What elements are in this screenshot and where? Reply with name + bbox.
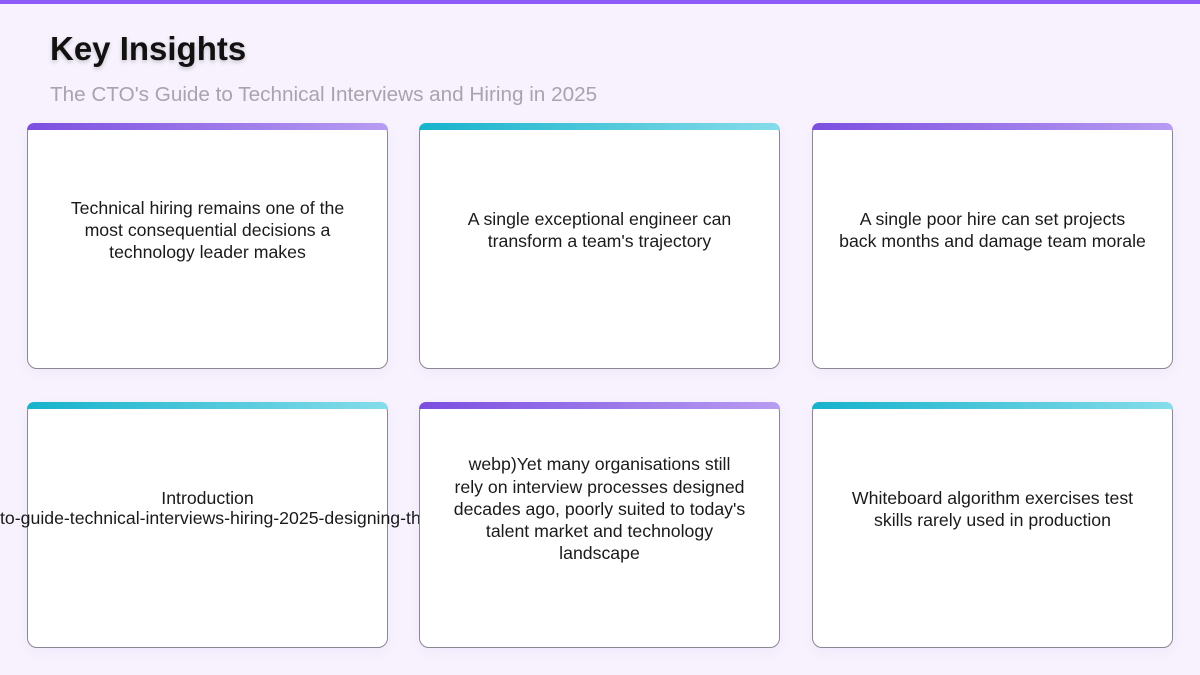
card 1: Technical hiring remains one of the — [71, 198, 344, 218]
card 5: landscape — [559, 543, 640, 563]
card 1: technology leader makes — [109, 242, 306, 262]
card 2 — [419, 123, 780, 369]
card 5: webp)Yet many organisations still — [469, 454, 730, 474]
title: Key Insights — [50, 30, 246, 67]
card 1 — [27, 123, 388, 369]
card 2: transform a team's trajectory — [488, 231, 711, 251]
card 5: rely on interview processes designed — [454, 477, 744, 497]
card 4 — [27, 402, 388, 648]
card 5: talent market and technology — [486, 521, 713, 541]
card 6: Whiteboard algorithm exercises test — [852, 488, 1133, 508]
card 6 — [812, 402, 1173, 648]
card 3: A single poor hire can set projects — [860, 209, 1125, 229]
card 6: skills rarely used in production — [874, 510, 1111, 530]
card 2: A single exceptional engineer can — [468, 209, 731, 229]
card 3 — [812, 123, 1173, 369]
overflow text: slug: to-guide-technical-interviews-hiring-2025-designing-the-process — [0, 508, 498, 528]
card 5 — [419, 402, 780, 648]
card 3: back months and damage team morale — [839, 231, 1146, 251]
card 4: Introduction — [161, 488, 254, 508]
card 1: most consequential decisions a — [85, 220, 330, 240]
card 5: decades ago, poorly suited to today's — [454, 499, 745, 519]
subtitle: The CTO's Guide to Technical Interviews and Hiring in 2025 — [50, 83, 597, 106]
